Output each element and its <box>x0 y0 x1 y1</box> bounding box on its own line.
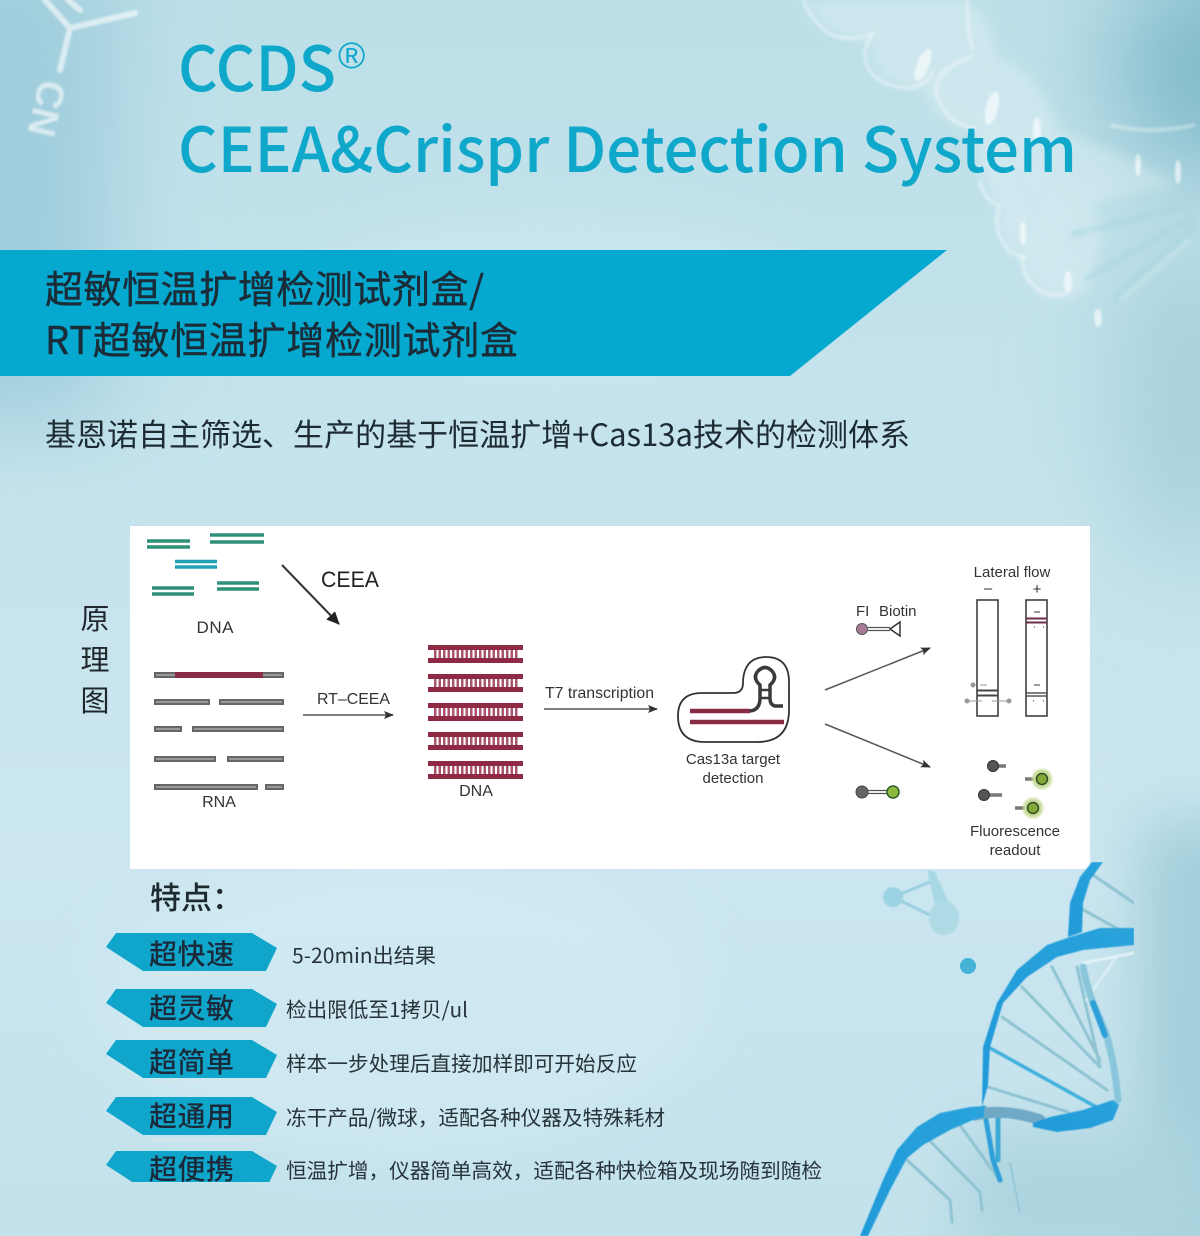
label: principle diagram: 理 <box>80 637 110 679</box>
fluorescence readout: Fluorescence <box>970 823 1060 840</box>
icon: background chemical structure with CN label: CN <box>19 76 73 141</box>
banner heading: RT超敏恒温扩增检测试剂盒 <box>45 310 518 365</box>
icon: droplet <box>960 958 976 974</box>
banner heading <box>45 259 518 365</box>
feature: ultra sensitive <box>106 987 468 1032</box>
DNA strands <box>147 535 264 637</box>
arrow: RT-CEEA <box>303 691 393 715</box>
title <box>178 19 1077 190</box>
feature: ultra portable: 超便携 <box>149 1148 234 1188</box>
fluorescent probe <box>856 786 899 798</box>
label: principle diagram: 图 <box>80 678 110 720</box>
banner heading: 超敏恒温扩增检测试剂盒/ <box>45 259 484 314</box>
arrow: CEEA: CEEA <box>321 567 379 592</box>
fluorescence readout: readout <box>990 842 1041 859</box>
label: principle diagram <box>80 596 110 720</box>
amplified DNA ladders <box>428 645 523 800</box>
right blob <box>1033 1100 1119 1132</box>
arrow: RT-CEEA: RT–CEEA <box>317 691 390 708</box>
FI Biotin probe: Biotin <box>879 603 917 620</box>
top strand <box>1068 862 1103 937</box>
Cas13a target detection <box>678 657 789 787</box>
title: CCDS <box>178 19 336 109</box>
feature: ultra universal <box>106 1095 665 1140</box>
arrow: CEEA <box>282 565 379 624</box>
RNA strands: RNA <box>202 794 236 811</box>
feature: ultra simple: 超简单 <box>149 1041 234 1081</box>
banner <box>0 250 947 376</box>
icon: DNA helix bottom right <box>860 862 1134 1236</box>
title: CEEA&Crispr Detection System <box>178 100 1077 190</box>
feature list <box>106 933 822 1189</box>
feature: ultra fast <box>106 933 436 976</box>
Cas13a target detection: detection <box>703 770 763 787</box>
feature: ultra sensitive: 超灵敏 <box>149 987 234 1027</box>
icon: background translucent DNA top right <box>803 0 1195 327</box>
subtitle: 基恩诺自主筛选、生产的基于恒温扩增+Cas13a技术的检测体系 <box>45 410 910 455</box>
amplified DNA ladders: DNA <box>459 783 493 800</box>
feature: ultra fast: 超快速 <box>149 933 234 973</box>
feature: ultra universal: 冻干产品/微球，适配各种仪器及特殊耗材 <box>286 1101 665 1131</box>
feature: ultra fast: 5-20min出结果 <box>292 939 436 969</box>
arrows to readouts <box>825 648 930 767</box>
label: principle diagram: 原 <box>80 596 110 638</box>
lateral flow readout: – <box>984 580 993 597</box>
arrow: T7 transcription <box>544 685 657 709</box>
fluorescence readout <box>970 760 1060 859</box>
lateral flow readout: + <box>1033 581 1042 598</box>
feature: ultra sensitive: 检出限低至1拷贝/ul <box>286 993 468 1023</box>
upper strand <box>982 928 1134 1107</box>
title: ® <box>338 35 365 76</box>
FI Biotin probe <box>856 603 917 636</box>
icon: background chemical structure with CN label <box>19 0 135 141</box>
lateral flow readout <box>965 564 1051 716</box>
lower strand <box>860 1106 984 1236</box>
feature: ultra simple: 样本一步处理后直接加样即可开始反应 <box>286 1047 637 1077</box>
feature: ultra portable <box>106 1151 822 1182</box>
DNA strands: DNA <box>196 618 234 637</box>
feature: ultra simple <box>106 1040 637 1082</box>
lateral flow readout: Lateral flow <box>974 564 1051 581</box>
feature: ultra portable: 恒温扩增，仪器简单高效，适配各种快检箱及现场随到随检 <box>286 1154 822 1184</box>
arrow: T7 transcription: T7 transcription <box>545 685 654 702</box>
icon: translucent molecule <box>883 870 959 935</box>
heading: features: 特点： <box>150 873 243 918</box>
FI Biotin probe: FI <box>856 603 869 620</box>
Cas13a target detection: Cas13a target <box>686 751 781 768</box>
feature: ultra universal: 超通用 <box>149 1095 234 1135</box>
panel: principle diagram <box>130 526 1090 869</box>
RNA strands <box>155 672 283 811</box>
